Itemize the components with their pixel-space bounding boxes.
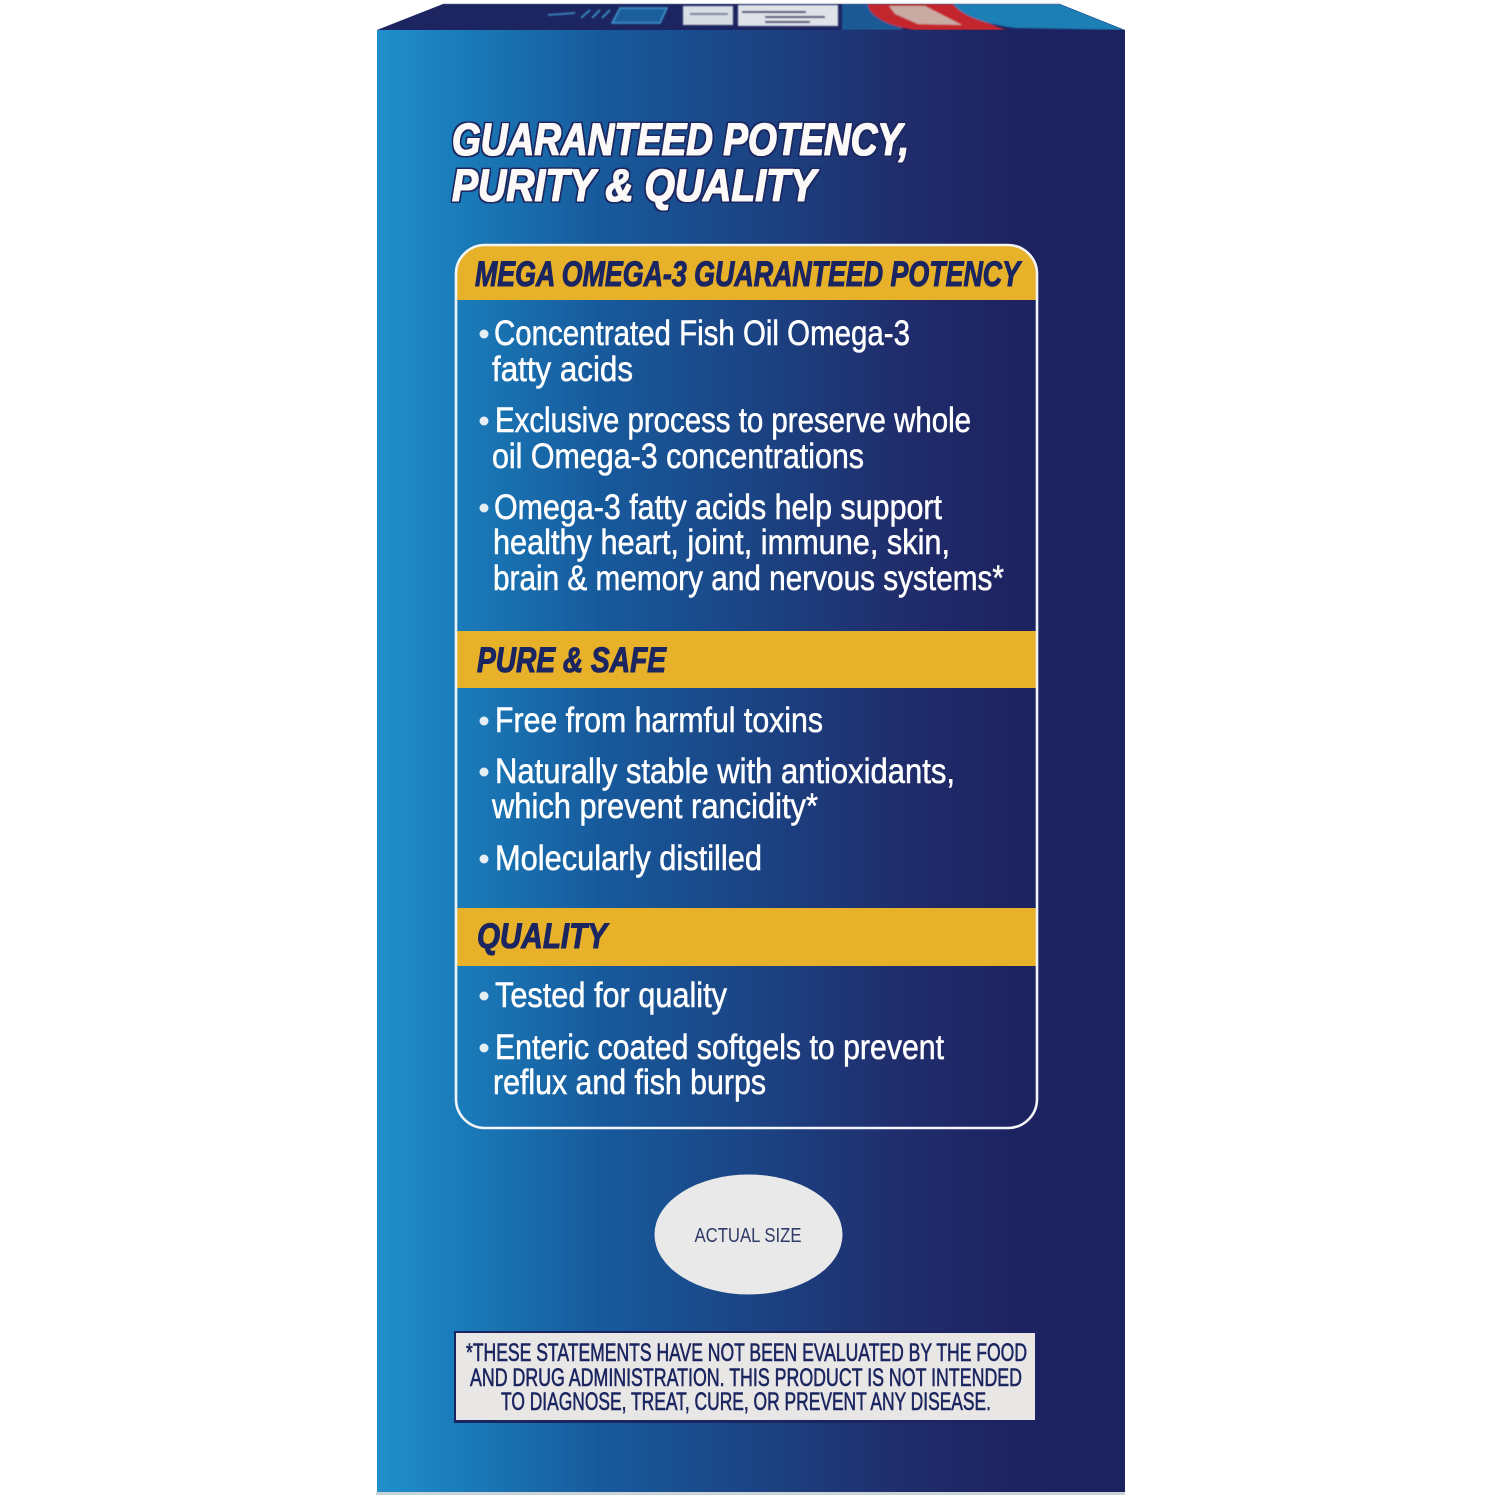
white text bars bbox=[683, 6, 733, 25]
list: pure and safe bbox=[480, 701, 955, 878]
list: potency: fatty acids bbox=[492, 350, 633, 389]
title: PURITY & QUALITY bbox=[452, 160, 819, 211]
list: potency: healthy heart, joint, immune, skin, bbox=[493, 523, 950, 562]
list: quality: reflux and fish burps bbox=[493, 1063, 766, 1102]
heading: potency: MEGA OMEGA-3 GUARANTEED POTENCY bbox=[475, 255, 1022, 294]
list: pure and safe: which prevent rancidity* bbox=[491, 787, 818, 826]
list: potency: brain & memory and nervous systems* bbox=[493, 559, 1004, 598]
list: quality: Tested for quality bbox=[495, 976, 727, 1015]
actual size softgel bbox=[654, 1174, 842, 1294]
list: potency: Exclusive process to preserve whole bbox=[495, 401, 971, 440]
heading: quality: QUALITY bbox=[477, 917, 609, 956]
flap top rim bbox=[443, 2, 1060, 4]
disclaimer box: *THESE STATEMENTS HAVE NOT BEEN EVALUATED BY THE FOOD bbox=[466, 1339, 1027, 1367]
list: potency: oil Omega-3 concentrations bbox=[492, 437, 864, 476]
list: potency: Concentrated Fish Oil Omega-3 bbox=[494, 314, 910, 353]
blue logos bbox=[612, 8, 667, 23]
list: pure and safe: Free from harmful toxins bbox=[495, 701, 823, 740]
box front face bbox=[377, 30, 1125, 1492]
list: pure and safe: Molecularly distilled bbox=[495, 839, 762, 878]
title: GUARANTEED POTENCY, bbox=[452, 114, 909, 165]
disclaimer box: TO DIAGNOSE, TREAT, CURE, OR PREVENT ANY DISEASE. bbox=[501, 1388, 991, 1416]
red seal bbox=[868, 4, 1006, 30]
title bbox=[452, 114, 909, 211]
list: potency: Omega-3 fatty acids help support bbox=[494, 488, 942, 527]
disclaimer box bbox=[454, 1331, 1037, 1423]
heading: pure and safe: PURE & SAFE bbox=[477, 641, 667, 680]
box top flap bbox=[377, 4, 1125, 30]
panel: benefits bbox=[456, 245, 1037, 1128]
section header band: potency bbox=[457, 246, 1036, 300]
mid blue strip bbox=[842, 4, 902, 30]
actual size softgel: ACTUAL SIZE bbox=[694, 1225, 802, 1247]
list: potency bbox=[480, 314, 1004, 598]
list: quality bbox=[480, 976, 944, 1102]
teal corner bbox=[953, 4, 1125, 30]
section header band: quality bbox=[457, 908, 1036, 966]
list: pure and safe: Naturally stable with antioxidants, bbox=[495, 752, 955, 791]
section header band: pure and safe bbox=[457, 631, 1036, 688]
bottom edge bbox=[376, 1492, 1125, 1495]
list: quality: Enteric coated softgels to prevent bbox=[495, 1028, 944, 1067]
disclaimer box: AND DRUG ADMINISTRATION. THIS PRODUCT IS NOT INTENDED bbox=[470, 1364, 1022, 1392]
seal emblem bbox=[889, 6, 962, 25]
panel outline bbox=[456, 245, 1037, 1128]
